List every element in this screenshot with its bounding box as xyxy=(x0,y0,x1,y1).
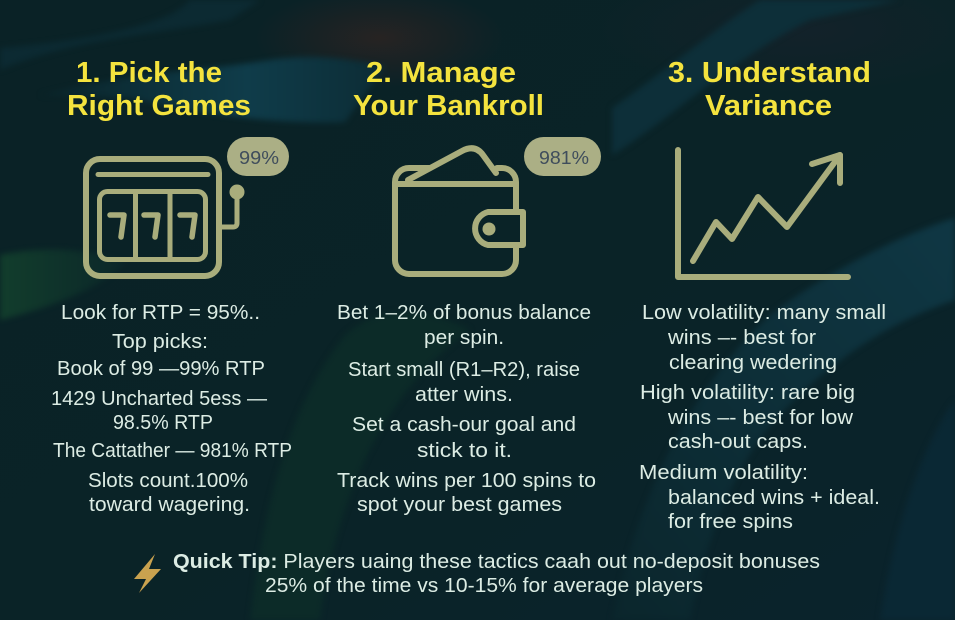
text block: manage your bankroll: atter wins. xyxy=(415,384,513,406)
icon: wallet xyxy=(395,148,523,274)
heading: 2. Manage Your Bankroll: Your Bankroll xyxy=(353,90,544,122)
text block: manage your bankroll: stick to it. xyxy=(417,440,512,462)
quick tip callout xyxy=(173,551,820,597)
text block: pick the right games: Look for RTP = 95%.. xyxy=(61,302,260,324)
text block: understand variance xyxy=(639,302,886,533)
text block: understand variance: balanced wins + ideal. xyxy=(668,487,880,509)
text block: understand variance: clearing wedering xyxy=(669,352,837,374)
badge: 99%: 99% xyxy=(239,148,279,168)
text block: understand variance: cash-out caps. xyxy=(668,431,808,453)
heading: 2. Manage Your Bankroll xyxy=(353,57,544,122)
heading: 2. Manage Your Bankroll: 2. Manage xyxy=(366,57,516,89)
text block: manage your bankroll: Set a cash-our goal and xyxy=(352,414,576,436)
text block: pick the right games: 98.5% RTP xyxy=(113,412,213,434)
heading: 1. Pick the Right Games xyxy=(67,57,251,122)
heading: 3. Understand Variance xyxy=(668,57,871,122)
heading: 3. Understand Variance: 3. Understand xyxy=(668,57,871,89)
text block: pick the right games xyxy=(51,302,292,516)
icon: rising line chart xyxy=(678,150,848,277)
text block: pick the right games: 1429 Uncharted 5ess — xyxy=(51,388,267,410)
heading: 3. Understand Variance: Variance xyxy=(705,90,832,122)
text block: understand variance: Low volatility: many small xyxy=(642,302,886,324)
text block: understand variance: High volatility: rare big xyxy=(640,382,855,404)
text block: manage your bankroll: Start small (R1–R2), raise xyxy=(348,359,580,381)
quick tip callout: 25% of the time vs 10-15% for average players xyxy=(265,575,703,597)
text block: manage your bankroll xyxy=(337,302,596,516)
icon: slot machine xyxy=(86,159,244,276)
text block: manage your bankroll: per spin. xyxy=(424,327,504,349)
text block: manage your bankroll: Bet 1–2% of bonus balance xyxy=(337,302,591,324)
text block: understand variance: for free spins xyxy=(668,511,793,533)
heading: 1. Pick the Right Games: Right Games xyxy=(67,90,251,122)
text block: pick the right games: The Cattather — 981% RTP xyxy=(53,440,292,462)
quick tip callout: Quick Tip: Players uaing these tactics caah out no-deposit bonuses xyxy=(173,551,820,573)
icon: lightning bolt xyxy=(134,554,161,593)
badge: 99% xyxy=(227,137,289,176)
text block: understand variance: wins –- best for low xyxy=(667,407,854,429)
text block: pick the right games: Top picks: xyxy=(112,331,208,353)
text block: manage your bankroll: Track wins per 100 spins to xyxy=(337,470,596,492)
badge: 981% xyxy=(524,137,601,176)
text block: pick the right games: Slots count.100% xyxy=(88,470,248,492)
text block: pick the right games: toward wagering. xyxy=(89,494,250,516)
badge: 981%: 981% xyxy=(539,148,589,168)
text block: understand variance: wins –- best for xyxy=(667,327,816,349)
text block: pick the right games: Book of 99 —99% RTP xyxy=(57,358,265,380)
text block: understand variance: Medium volatility: xyxy=(639,462,808,484)
text block: manage your bankroll: spot your best games xyxy=(357,494,562,516)
heading: 1. Pick the Right Games: 1. Pick the xyxy=(76,57,222,89)
